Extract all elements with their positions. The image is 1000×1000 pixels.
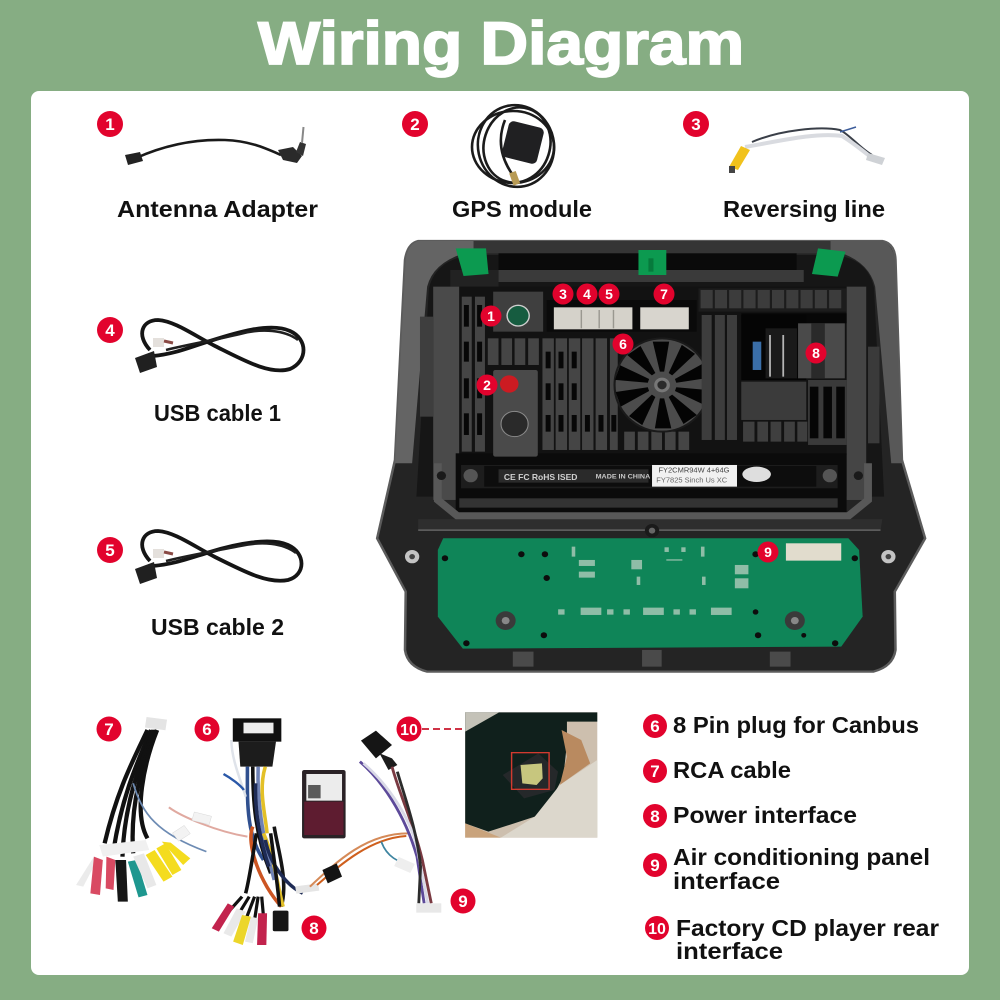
- lower frame: [456, 453, 847, 515]
- unit badges: 1: [487, 308, 495, 324]
- legend item 10: [645, 915, 939, 964]
- head unit photo: rear of the radio and air conditioning panel: CE FC RoHS ISED: [504, 473, 577, 482]
- main body: [459, 287, 847, 455]
- dashed leader line: [422, 728, 465, 730]
- legend item 10: interface: [676, 938, 783, 964]
- item 3: reversing line: Reversing line: [723, 196, 885, 222]
- head unit photo: rear of the radio and air conditioning panel: FY2CMR94W 4+64G: [658, 466, 730, 475]
- legend item 9: 9: [650, 856, 660, 875]
- side slats: [420, 317, 433, 417]
- legend item 9: [643, 844, 930, 894]
- outer bezel: [377, 241, 925, 672]
- legend item 9: Air conditioning panel: [673, 844, 930, 870]
- unit badges: 7: [660, 286, 668, 302]
- clips: [456, 248, 489, 276]
- unit badges: [476, 284, 826, 562]
- power and canbus harness: 8: [309, 919, 319, 938]
- legend item 8: 8: [650, 807, 660, 826]
- item 4: USB cable 1: [97, 317, 304, 426]
- legend item 9: interface: [673, 868, 780, 894]
- GPS block: [493, 370, 538, 457]
- item 2: GPS module: GPS module: [452, 196, 592, 222]
- item 4: USB cable 1: 4: [105, 321, 115, 340]
- label bar: [461, 465, 838, 488]
- item 3: reversing line: [683, 111, 885, 222]
- legend item 6: 6: [650, 717, 660, 736]
- air conditioning harness 9: 10: [400, 722, 418, 739]
- canbus decoder box: [302, 770, 346, 838]
- item 5: USB cable 2: USB cable 2: [151, 614, 284, 640]
- fan: [615, 338, 710, 432]
- item 1: antenna adapter: [97, 111, 318, 222]
- air conditioning harness 9: 9: [458, 892, 468, 911]
- unit badges: 9: [764, 544, 772, 560]
- legend item 7: 7: [650, 762, 660, 781]
- item 1: antenna adapter: Antenna Adapter: [117, 196, 318, 222]
- circuit board: [438, 538, 863, 649]
- head unit photo: rear of the radio and air conditioning panel: FY7825 Sinch Us XC: [656, 476, 727, 485]
- legend item 8: Power interface: [673, 802, 857, 828]
- divider ledge: [418, 519, 882, 531]
- legend item 6: 8 Pin plug for Canbus: [673, 712, 919, 738]
- power and canbus harness: 6: [202, 720, 212, 739]
- right ribs and power socket: [698, 288, 847, 312]
- RCA cable 7: 7: [104, 720, 114, 739]
- legend item 10: 10: [648, 921, 666, 938]
- ribs: [462, 297, 689, 452]
- upper parts: [493, 292, 543, 332]
- air conditioning harness 9: [360, 716, 476, 914]
- item 1: antenna adapter: 1: [105, 115, 115, 134]
- unit badges: 6: [619, 336, 627, 352]
- item 5: USB cable 2: [97, 531, 302, 640]
- title: Wiring Diagram: [258, 10, 744, 77]
- unit badges: 4: [583, 286, 591, 302]
- legend item 7: RCA cable: [673, 757, 791, 783]
- head unit photo: rear of the radio and air conditioning panel: MADE IN CHINA: [596, 473, 650, 480]
- frame bars: [433, 287, 459, 500]
- item 2: GPS module: [402, 98, 592, 222]
- legend item 10: Factory CD player rear: [676, 915, 939, 941]
- unit badges: 3: [559, 286, 567, 302]
- power and canbus harness: [194, 716, 408, 945]
- unit badges: 2: [483, 377, 491, 393]
- item 5: USB cable 2: 5: [105, 541, 115, 560]
- item 4: USB cable 1: USB cable 1: [154, 400, 281, 426]
- item 2: GPS module: 2: [410, 115, 420, 134]
- photo: factory CD player rear: [465, 712, 597, 838]
- unit badges: 5: [605, 286, 613, 302]
- head unit photo: rear of the radio and air conditioning panel: [377, 241, 925, 672]
- rims: [395, 241, 477, 463]
- lower clips: [513, 652, 534, 667]
- RCA cable 7: [76, 716, 247, 902]
- item 3: reversing line: 3: [691, 115, 701, 134]
- unit badges: 8: [812, 345, 820, 361]
